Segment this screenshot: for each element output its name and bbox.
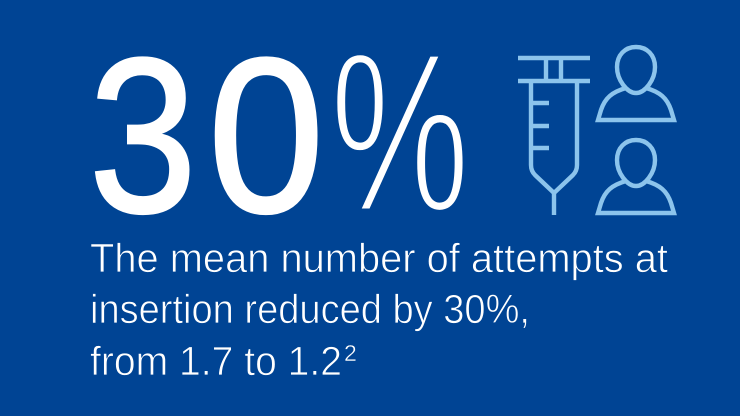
text block: description bbox=[90, 235, 669, 384]
icon: syringe bbox=[518, 58, 590, 215]
text block: description: insertion reduced by 30%, bbox=[90, 286, 530, 332]
icon: person bottom bbox=[598, 140, 674, 213]
icon: person top bbox=[598, 47, 674, 120]
text block: description: from 1.7 to 1.2 bbox=[90, 338, 342, 384]
text block: description: The mean number of attempts at bbox=[90, 235, 669, 281]
title: 30%: 0 bbox=[208, 14, 324, 259]
text block: description: 2 bbox=[344, 340, 357, 366]
title: 30%: 3 bbox=[89, 12, 197, 258]
title: 30%: % bbox=[330, 5, 470, 260]
title: 30% bbox=[89, 5, 470, 260]
